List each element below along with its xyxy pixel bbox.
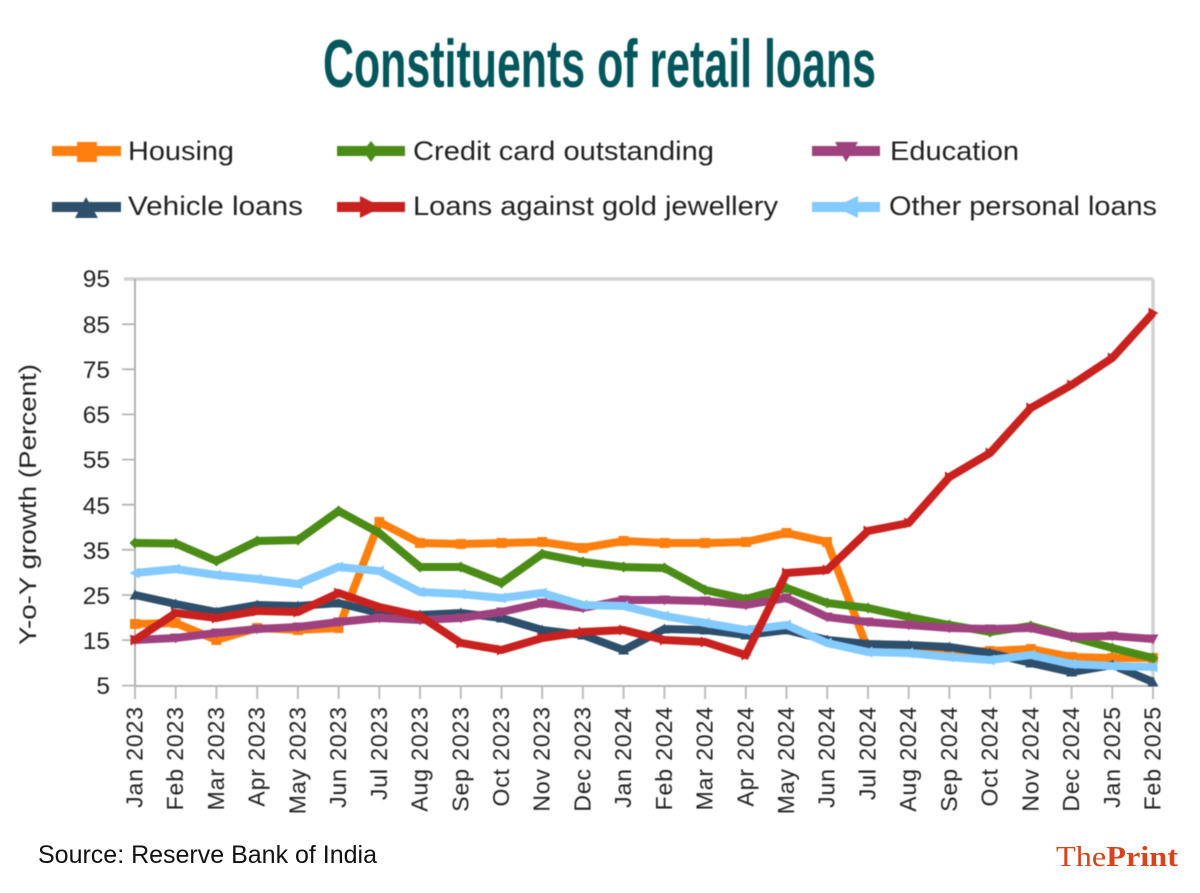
logo: ThePrint: ThePrint [1056,841,1178,873]
legend item: Education: Education [890,136,1019,166]
x-axis labels: May 2023 [284,706,310,814]
x-axis labels: Dec 2023 [569,706,595,812]
series: Education [135,598,1153,640]
legend item: Other personal loans: Other personal loans [889,191,1157,221]
x-axis labels [122,706,1166,814]
y-axis labels: 5 [96,673,110,700]
series: Loans against gold jewellery [135,313,1153,655]
y-axis labels: 15 [83,628,110,655]
x-axis labels: Dec 2024 [1058,706,1084,812]
y-axis labels: 85 [83,312,110,339]
legend [52,136,1157,221]
y-axis labels: 45 [83,493,110,520]
x-axis labels: Jun 2023 [325,706,351,808]
x-axis labels: Nov 2024 [1017,706,1043,812]
x-axis labels: Mar 2024 [692,706,718,810]
source note: Source: Reserve Bank of India [38,841,377,869]
legend item: Vehicle loans: Vehicle loans [128,191,303,221]
x-axis labels: Jul 2024 [854,706,880,800]
x-axis labels: Oct 2023 [488,706,514,807]
series: Vehicle loans [135,595,1153,682]
legend item: Credit card outstanding: Credit card outstanding [413,136,714,166]
legend item: Housing: Housing [128,136,234,166]
x-axis labels: Feb 2024 [651,706,677,810]
x-axis labels: Feb 2025 [1140,706,1166,810]
y-axis labels: 25 [83,583,110,610]
x-axis labels: Aug 2023 [406,706,432,812]
line chart [15,266,1166,814]
x-axis labels: Sep 2023 [447,706,473,812]
series: Housing [135,522,1153,658]
legend item: Housing [52,136,234,166]
x-axis labels: Oct 2024 [977,706,1003,807]
x-axis labels: Jan 2025 [1099,706,1125,808]
x-axis labels: Jan 2023 [122,706,148,808]
series: Other personal loans [135,567,1153,667]
legend item: Education [812,136,1019,166]
x-axis labels: Sep 2024 [936,706,962,812]
y-axis labels: 35 [83,538,110,565]
x-axis labels: Nov 2023 [529,706,555,812]
x-axis labels: Aug 2024 [895,706,921,812]
y-axis labels [83,266,110,700]
x-axis labels: Apr 2024 [732,706,758,807]
y-axis labels: 75 [83,357,110,384]
plot frame and ticks [122,279,1153,699]
x-axis labels: Jan 2024 [610,706,636,808]
x-axis labels: Jun 2024 [814,706,840,808]
legend item: Vehicle loans [52,191,303,221]
x-axis labels: Feb 2023 [162,706,188,810]
legend item: Loans against gold jewellery: Loans against gold jewellery [413,191,779,221]
x-axis labels: Mar 2023 [203,706,229,810]
y-axis labels: 55 [83,447,110,474]
x-axis labels: Jul 2023 [366,706,392,800]
series: Credit card outstanding [135,511,1153,658]
x-axis labels: Apr 2023 [244,706,270,807]
x-axis labels: May 2024 [773,706,799,814]
title: Constituents of retail loans [323,26,876,102]
y-axis labels: 95 [83,266,110,293]
y-axis title: Y-o-Y growth (Percent) [15,364,42,645]
y-axis labels: 65 [83,402,110,429]
